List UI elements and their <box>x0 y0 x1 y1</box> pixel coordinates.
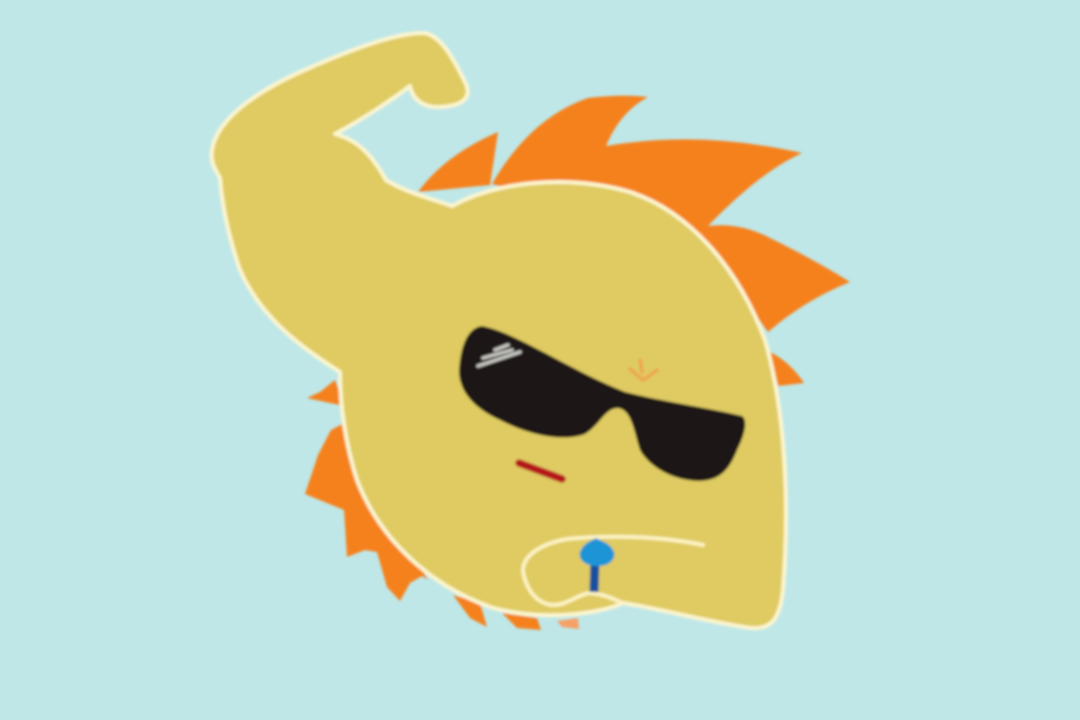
mouth <box>519 463 562 479</box>
fist outline <box>523 537 703 605</box>
earring post <box>594 560 595 592</box>
forehead mark <box>630 360 657 380</box>
body with flexed arm <box>211 33 786 628</box>
upper hair spikes <box>418 96 850 386</box>
earring stud <box>580 538 614 566</box>
lower hair spikes <box>305 380 579 630</box>
sunglasses glare <box>478 345 520 366</box>
sunglasses <box>459 326 745 481</box>
mascot group <box>211 33 850 630</box>
